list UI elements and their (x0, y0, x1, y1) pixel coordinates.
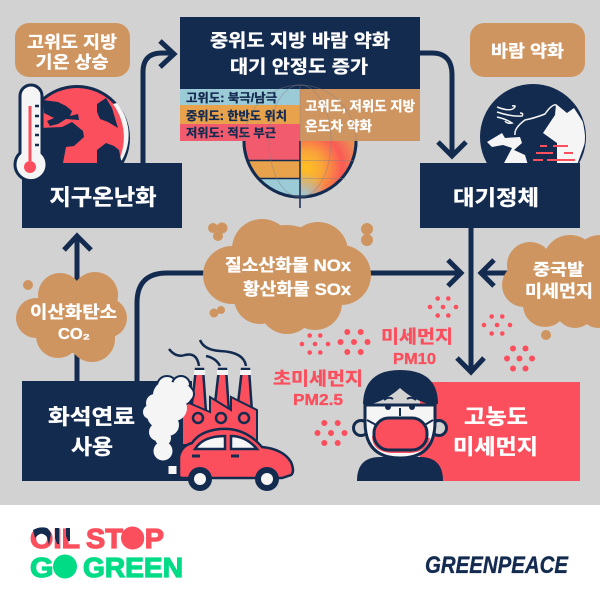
box: atmospheric stagnation (420, 163, 580, 228)
cloud: carbon dioxide: 이산화탄소 (30, 303, 117, 322)
legend: latitude bands (180, 89, 300, 141)
logo line: go green: GO (30, 552, 77, 583)
box: fossil fuel use: 사용 (71, 436, 113, 459)
box: mid-latitude wind weakening (180, 17, 420, 89)
callout: wind weakening (470, 23, 585, 77)
cloud: fine dust from China (502, 235, 600, 340)
icon: car (168, 429, 293, 491)
cloud: NOx and SOx: 질소산화물 NOx (225, 256, 352, 275)
box: atmospheric stagnation: 대기정체 (453, 187, 539, 210)
label: PM2.5 ultrafine dust (273, 369, 363, 409)
box: high concentration fine dust: 미세먼지 (453, 436, 538, 459)
logo line: oil stop (30, 523, 164, 554)
particles: fine dust dots (300, 296, 535, 446)
arrow: fossil fuel to high concentration (137, 260, 461, 383)
label: PM2.5 ultrafine dust: 초미세먼지 (273, 369, 363, 389)
logo: Oil Stop Go Green (30, 523, 183, 583)
icon: factory (169, 340, 257, 450)
callout: temperature difference weakening: 고위도, 저위도 지방 (305, 99, 416, 114)
cloud: fine dust from China: 미세먼지 (525, 282, 593, 301)
arrow: mid-latitude to stagnation (420, 53, 466, 156)
callout: high latitude temperature rise: 고위도 지방 (27, 33, 117, 52)
logo line: oil stop: STOP (86, 523, 164, 554)
arrow: global warming to mid-latitude (143, 41, 174, 165)
label: PM10 fine dust: 미세먼지 (381, 327, 453, 347)
logo line: oil stop: OIL (30, 523, 80, 554)
arrow: from China (481, 260, 515, 286)
arrow: fossil fuel to global warming (64, 236, 91, 383)
logo line: go green: GREEN (83, 552, 183, 583)
label: PM10 fine dust (381, 327, 453, 368)
callout: wind weakening: 바람 약화 (491, 42, 564, 61)
legend: latitude bands: 중위도: 한반도 위치 (186, 108, 287, 123)
icon: stagnant air over Korea map (480, 84, 586, 163)
cloud: carbon dioxide: CO₂ (58, 326, 90, 343)
cloud: carbon dioxide (16, 272, 127, 362)
logo line: go green (30, 552, 183, 583)
arrow: stagnation to high concentration (457, 226, 484, 372)
icon: thermometer (15, 85, 47, 181)
label: PM2.5 ultrafine dust: PM2.5 (293, 392, 343, 409)
legend: latitude bands: 고위도: 북극/남극 (186, 91, 277, 105)
callout: temperature difference weakening (300, 89, 420, 141)
box: fossil fuel use (22, 381, 192, 481)
box: high concentration fine dust: 고농도 (464, 406, 528, 429)
box: mid-latitude wind weakening: 대기 안정도 증가 (230, 57, 368, 77)
globe grid lines (244, 85, 356, 197)
box: fossil fuel use: 화석연료 (48, 406, 135, 429)
cloud: NOx and SOx: 황산화물 SOx (243, 280, 352, 299)
cloud: fine dust from China: 중국발 (533, 261, 584, 279)
callout: high latitude temperature rise: 기온 상승 (36, 53, 108, 72)
icon: warming earth (44, 85, 130, 163)
icon: person wearing mask (354, 370, 446, 481)
cloud: NOx and SOx (203, 219, 373, 334)
label: PM10 fine dust: PM10 (393, 351, 436, 368)
box: high concentration fine dust (420, 382, 580, 481)
legend: latitude bands: 저위도: 적도 부근 (186, 125, 276, 140)
callout: high latitude temperature rise (15, 23, 130, 77)
box: global warming: 지구온난화 (50, 185, 156, 210)
box: mid-latitude wind weakening: 중위도 지방 바람 약화 (210, 31, 390, 51)
icon: globe latitude diagram (242, 141, 358, 208)
box: global warming (22, 163, 182, 228)
logo: Greenpeace: GREENPEACE (425, 552, 569, 579)
callout: temperature difference weakening: 온도차 약화 (305, 119, 373, 134)
icon: smoke (143, 376, 194, 460)
